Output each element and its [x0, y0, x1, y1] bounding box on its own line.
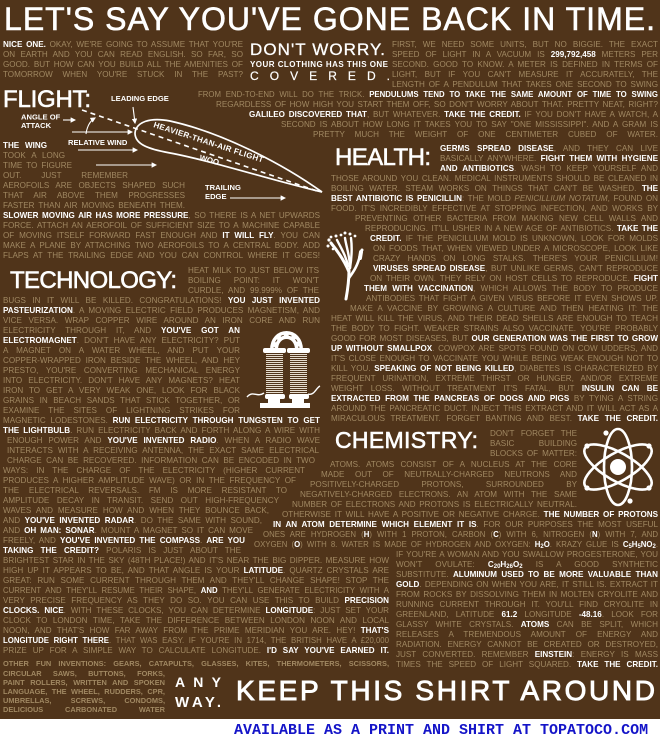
- text block: health main: FREQUENT URINATION, EXTREME THIRST OR HUNGER, AND/OR EXTREME: [331, 374, 658, 383]
- text block: units: FIRST, WE NEED SOME UNITS, BUT NO BIGGIE. THE EXACT: [392, 40, 658, 49]
- text block: the wing: FASTER THAN AIR MOVING BENEATH THEM.: [3, 201, 185, 210]
- diagram: aerofoil: [21, 94, 322, 201]
- text block: health main: GOOD FOR MOST DISEASES, BUT OUR GENERATION WAS THE FIRST TO GROW: [331, 334, 658, 343]
- text block: health main: FOOD. IT'S INCREDIBLY EFFECTIVE AT STOPPING INFECTION, AND WORKS BY: [331, 204, 658, 213]
- text block: other inventions: [3, 659, 389, 714]
- text block: pasteurization intro: [188, 266, 319, 295]
- text block: technology main: NOON, AND THAT'S HOW FAR AWAY FROM THE PRIME MERIDIAN YOU ARE. HEY! THAT'S: [3, 626, 389, 635]
- text block: technology main: CLOCK TO LONDON TIME, TAKE THE DIFFERENCE BETWEEN LONDON NOON AND LOCAL: [3, 616, 389, 625]
- text block: technology main: IRON TO GET A VERY WEAK ONE, LOOK FOR BLACK: [3, 386, 240, 395]
- chord line: [82, 110, 317, 191]
- text block: health main: AROUND THE PANCREATIC DUCT. INJECT THIS EXTRACT AND IT WILL ACT AS A: [331, 404, 658, 413]
- text block: health main: THOSE AROUND YOU CLEAN. MEDICAL INSTRUMENTS SHOULD BE CLEANED IN: [331, 174, 658, 183]
- text block: atoms: [254, 460, 658, 550]
- text block: health main: ANTIBODIES THAT FIGHT A GIVEN VIRUS BEFORE IT EVEN SHOWS UP.: [366, 294, 658, 303]
- text block: technology main: EXAMINE THE SITES OF LIGHTNING STRIKES FOR: [3, 406, 240, 415]
- text block: chemistry lower: GOLD. DEPENDING ON WHEN YOU ARE, IT STILL IS. EXTRACT IT: [396, 580, 658, 589]
- text block: the wing: FLAPS AT THE TRAILING EDGE AND YOU CAN CONTROL WHERE IT GOES!: [3, 251, 320, 260]
- text block: the wing: MAKE A PLANE BY ATTACHING TWO AEROFOILS TO A CENTRAL BODY. ADD: [3, 241, 320, 250]
- text block: pendulums: REGARDLESS OF HOW HIGH YOU START THEM OFF, SO DON'T WORRY ABOUT THAT. PRETTY NEAT, RIGHT?: [216, 100, 658, 109]
- text block: the wing: FORCE. ATTACH AN AEROFOIL OF SUFFICIENT SIZE TO A MACHINE CAPABLE: [3, 221, 320, 230]
- text block: technology main: TAKING THE CREDIT? POLARIS IS JUST ABOUT THE: [3, 546, 241, 555]
- text block: other inventions: DELICIOUS CARBONATED WATER: [3, 704, 165, 714]
- text block: chemistry lower: JUST CONVERTED. REMEMBER EINSTEIN: ENERGY IS MASS: [396, 650, 658, 659]
- text block: technology main: [3, 296, 389, 655]
- text block: chemistry lower: RADIATION. ENERGY CANNOT BE CREATED OR DESTROYED,: [396, 640, 658, 649]
- diagram labels: EDGE: [205, 192, 227, 201]
- text block: intro: NICE ONE. OKAY, WE'RE GOING TO ASSUME THAT YOU'RE: [3, 40, 243, 49]
- text block: atoms: MADE OUT OF NEUTRALLY-CHARGED NEUTRONS AND: [321, 470, 577, 479]
- text block: intro: GOOD. BUT HOW CAN YOU BUILD ALL THE AMENITIES OF: [3, 60, 243, 69]
- text block: technology main: AMPLITUDE DECAY IN TRANSIT. SEND OUT HIGH-FREQUENCY: [3, 496, 279, 505]
- text block: technology main: PRIZE UP FOR A SIMPLE WAY TO CALCULATE LONGITUDE. I'D SAY YOU'VE EARNED IT.: [3, 646, 389, 655]
- text block: technology main: COPPER-WRAPPED IRON BESIDE THE WHEEL, AND HEY: [3, 356, 240, 365]
- text block: health main: PREVENTING OTHER BACTERIA FROM MAKING NEW CELL WALLS AND: [355, 214, 658, 223]
- diagram labels: HEAVIER-THAN-AIR FLIGHT: [152, 120, 265, 164]
- text block: the wing: THE WING: [3, 141, 47, 150]
- text block: health main: THE BODY TO FIGHT. WEAKER STRAINS ALSO VACCINATE. YOU'RE PROBABLY: [331, 324, 658, 333]
- text block: health main: KILL YOU. SPEAKING OF NOT BEING KILLED, DIABETES IS CHARACTERIZED BY: [331, 364, 658, 373]
- callout: keep this shirt around: KEEP THIS SHIRT AROUND: [236, 675, 655, 706]
- title: LET'S SAY YOU'VE GONE BACK IN TIME.: [4, 1, 655, 37]
- text block: other inventions: UMBRELLAS, SCREWS, CONDOMS,: [3, 696, 165, 704]
- text block: technology main: ELECTRICITY THROUGH IT, AND YOU'VE GOT AN: [3, 326, 240, 335]
- text block: technology main: VERY PRECISE FREQUENCY AS THEY DO SO. YOU CAN USE THIS TO BUILD PRECISION: [3, 596, 389, 605]
- text block: other inventions: OTHER FUN INVENTIONS: GEARS, CATAPULTS, GLASSES, KITES, THERMOMETERS, SCISSORS,: [3, 659, 389, 668]
- text block: atoms: IN AN ATOM DETERMINE WHICH ELEMENT IT IS. FOR OUR PURPOSES THE MOST USEFUL: [273, 520, 658, 529]
- text block: other inventions: PAINT ROLLERS, WRITTEN AND SPOKEN: [3, 678, 165, 686]
- callout: don't worry: C O V E R E D .: [250, 69, 390, 83]
- text block: technology main: INTO ELECTRICITY. DON'T HAVE ANY MAGNETS? HEAT: [3, 376, 240, 385]
- text block: health main: [331, 174, 658, 423]
- text block: atoms: NUMBER OF ELECTRONS AND PROTONS IS ELECTRICALLY NEUTRAL.: [292, 500, 577, 509]
- text block: health main: ON THEIR OWN. THEY RELY ON HOST CELLS TO REPRODUCE. FIGHT: [370, 274, 658, 283]
- text block: chemistry lower: TIMES THE SPEED OF LIGHT SQUARED. TAKE THE CREDIT.: [396, 660, 658, 669]
- text block: technology main: BRIGHTEST STAR IN THE SKY (48TH PLACE!) AND IT'S NEAR THE BIG DIPPER. MEASURE HOW: [3, 556, 389, 565]
- text block: the wing: OUT. JUST REMEMBER: [3, 171, 128, 180]
- text block: basic building blocks: BLOCKS OF MATTER:: [490, 449, 577, 458]
- text block: chemistry lower: WON'T OVULATE: C20H26O2 IS A GOOD SYNTHETIC: [396, 560, 658, 570]
- text block: units: LIGHT, BUT IF YOU CAN'T MEASURE IT ACCURATELY, THE: [392, 70, 658, 79]
- diagram labels: [21, 94, 265, 201]
- text block: technology main: CLOCKS. NICE. WITH THESE CLOCKS, YOU CAN DETERMINE LONGITUDE: JUST SET YOUR: [3, 606, 389, 615]
- diagram labels: TRAILING: [205, 183, 241, 192]
- text block: germs: AND ANTIBIOTICS. WASH TO KEEP YOURSELF AND: [440, 164, 658, 173]
- text block: technology main: LONGITUDE RIGHT THERE. THAT WAS EASY. IF YOU'RE IN 1714, THE BRITISH HAVE A £20,000: [3, 636, 389, 645]
- text block: health main: IT'S CLOSE ENOUGH TO VACCINATE YOU WHILE BEING WEAK ENOUGH NOT TO: [331, 354, 658, 363]
- text block: technology main: PRODUCES A HIGHER AMPLITUDE WAVE) OR IN THE FREQUENCY OF: [3, 476, 296, 485]
- text block: technology main: WAVES AND MEASURE HOW AND WHEN THEY BOUNCE BACK,: [3, 506, 269, 515]
- text block: other inventions: LANGUAGE, THE WHEEL, RUDDERS, CPR,: [3, 686, 165, 696]
- text block: health main: BEST ANTIBIOTIC IS PENICILLIN: THE MOLD PENICILLIUM NOTATUM, FOUND ON: [331, 194, 658, 203]
- text block: technology main: ELECTROMAGNET. DON'T HAVE ANY ELECTRICITY? PUT: [3, 336, 240, 345]
- text block: chemistry lower: FROM ROCKS BY DISSOLVING THEM IN MOLTEN CRYOLITE AND: [396, 590, 658, 599]
- text block: health main: THEM WITH VACCINATION, WHICH ALLOWS THE BODY TO PRODUCE: [364, 284, 658, 293]
- text block: basic building blocks: BASIC BUILDING: [490, 439, 577, 448]
- text block: health main: CRAZY HANDS ON LONG STALKS. THERE'S YOUR PENICILLIUM!: [373, 254, 658, 263]
- text block: the wing: TIME TO FIGURE: [3, 161, 72, 170]
- text block: units: [392, 40, 658, 89]
- text block: pendulums: SECOND IS ABOUT HOW LONG IT TAKES YOU TO SAY "ONE MISSISSIPPI". AND A GRAM IS: [281, 120, 658, 129]
- text block: technology main: PASTEURIZATION. A MOVING ELECTRIC FIELD PRODUCES MAGNETISM, AND: [3, 306, 320, 315]
- text block: technology main: THE LIGHTBULB. RUN ELECTRICITY BACK AND FORTH ALONG A WIRE WITH: [3, 426, 320, 435]
- text block: pasteurization intro: BOILING POINT: IT WON'T: [188, 276, 319, 285]
- text block: technology main: MAGNETIC LODESTONES. RUN ELECTRICITY THROUGH TUNGSTEN TO GET: [3, 416, 320, 425]
- text block: chemistry lower: RELEASES A TREMENDOUS AMOUNT OF ENERGY AND: [396, 630, 658, 639]
- text block: technology main: AND YOU'VE INVENTED RADAR. DO THE SAME WITH SOUND,: [3, 516, 262, 525]
- text block: health main: VIRUSES SPREAD DISEASE, BUT UNLIKE GERMS, CAN'T REPRODUCE: [373, 264, 658, 273]
- text block: units: SPEED OF LIGHT IN A VACUUM IS 299,792,458 METERS PER: [392, 50, 658, 59]
- callout: any way: [175, 674, 222, 711]
- text block: health main: MIRACULOUS TREATMENT. FORGET BANTING AND BEST. TAKE THE CREDIT.: [331, 414, 658, 423]
- text block: basic building blocks: DON'T FORGET THE: [490, 429, 577, 438]
- text block: technology main: FREELY, AND YOU'VE INVENTED THE COMPASS. ARE YOU: [3, 536, 245, 545]
- text block: health main: ON FOODS THAT, WHEN VIEWED UNDER A MICROSCOPE, LOOK LIKE: [373, 244, 658, 253]
- text block: health main: BOILING WATER. STEAM WORKS ON THINGS THAT CAN'T BE WASHED. THE: [331, 184, 658, 193]
- callout: any way: WAY.: [175, 694, 221, 711]
- text block: atoms: NEGATIVELY-CHARGED ELECTRONS. AN ATOM WITH THE SAME: [300, 490, 577, 499]
- text block: technology main: BUGS IN IT WILL BE KILLED. CONGRATULATIONS! YOU JUST INVENTED: [3, 296, 320, 305]
- text block: basic building blocks: [490, 429, 577, 458]
- text block: health main: EXTRACTED FROM THE PANCREAS OF DOGS AND PIGS BY TYING A STRING: [331, 394, 658, 403]
- text block: chemistry lower: RUNNING CURRENT THROUGH IT. YOU'LL FIND CRYOLITE IN: [396, 600, 658, 609]
- text block: chemistry lower: GREENLAND, LATITUDE 61.2 LONGITUDE -48.16. LOOK FOR: [396, 610, 658, 619]
- text block: technology main: HIGH UP IT APPEARS TO BE, AND THAT ANGLE IS YOUR LATITUDE. QUARTZ CRYSTALS ARE: [3, 566, 389, 575]
- coils: [266, 353, 283, 395]
- callout: don't worry: [250, 40, 390, 83]
- text block: pendulums: PRETTY MUCH THE WEIGHT OF ONE CENTIMETER CUBED OF WATER.: [313, 130, 658, 139]
- diagram labels: ATTACK: [21, 121, 52, 130]
- text block: health main: HEAT WILL KILL THE VIRUS, AND THEIR DEAD SHELLS ARE ENOUGH TO TEACH: [331, 314, 658, 323]
- text block: units: LENGTH OF A PENDULUM THAT TAKES ONE SECOND TO SWING: [392, 80, 658, 89]
- text block: the wing: [3, 141, 320, 260]
- text block: the wing: AEROFOILS ARE OBJECTS SHAPED SUCH: [3, 181, 185, 190]
- text block: technology main: VICE VERSA. WRAP COPPER WIRE AROUND AN IRON CORE AND RUN: [3, 316, 320, 325]
- heading: chemistry: CHEMISTRY:: [335, 427, 478, 453]
- text block: technology main: CHARGE CAN BE RECOVERED. INFORMATION CAN BE ENCODED IN TWO: [7, 456, 315, 465]
- wires: [247, 386, 320, 397]
- text block: health main: WEIGHT LOSS. WITHOUT TREATMENT IT'S FATAL, BUT INSULIN CAN BE: [331, 384, 658, 393]
- aerofoil outline: [135, 120, 322, 192]
- text block: pendulums: GALILEO DISCOVERED THAT, BUT WHATEVER. TAKE THE CREDIT. IF YOU DON'T HAVE A WATCH, A: [249, 110, 658, 119]
- text block: atoms: POSITIVELY-CHARGED PROTONS, SURROUNDED BY: [310, 480, 577, 489]
- magnet arch: [274, 335, 299, 350]
- heading: health: HEALTH:: [335, 144, 431, 171]
- text block: chemistry lower: IF YOU'RE A WOMAN AND YOU SWALLOW PROGESTERONE, YOU: [396, 550, 658, 559]
- text block: technology main: GRAINS IN BEACH SANDS THAT STICK TOGETHER, OR: [3, 396, 240, 405]
- text block: pendulums: [198, 90, 658, 139]
- text block: the wing: OF MOVING ITSELF FORWARD FAST ENOUGH AND IT WILL FLY. YOU CAN: [3, 231, 320, 240]
- text block: intro: ON EARTH AND YOU CAN READ ENGLISH. SO FAR, SO: [3, 50, 243, 59]
- callout: any way: A N Y: [175, 674, 222, 690]
- callout: don't worry: DON'T WORRY.: [250, 40, 385, 59]
- icon: electromagnet: [246, 331, 320, 408]
- text block: atoms: ONES ARE HYDROGEN (H) WITH 1 PROTON, CARBON (C) WITH 6, NITROGEN (N) WITH 7, AND: [263, 530, 658, 539]
- text block: germs: GERMS SPREAD DISEASE, AND THEY CAN LIVE: [440, 144, 658, 153]
- text block: the wing: THAT AIR ABOVE THEM PROGRESSES: [3, 191, 185, 200]
- text block: the wing: SLOWER MOVING AIR HAS MORE PRESSURE, SO THERE IS A NET UPWARDS: [3, 211, 320, 220]
- text block: technology main: AND OH MAN: SONAR. MOUNT A MAGNET SO IT CAN MOVE: [3, 526, 253, 535]
- text block: chemistry lower: GLASSY WHITE CRYSTALS. ATOMS CAN BE SPLIT, WHICH: [396, 620, 658, 629]
- footer link text: AVAILABLE AS A PRINT AND SHIRT AT TOPATOCO.COM: [234, 722, 648, 739]
- flow arrows: [63, 107, 285, 198]
- text block: technology main: WAYS: IN THE CHARGE OF THE ELECTRICITY (HIGHER CURRENT: [3, 466, 305, 475]
- text block: health main: CREDIT. IF THE PENICILLIUM MOLD IS UNKNOWN, LOOK FOR MOLDS: [370, 234, 658, 243]
- text block: technology main: CURRENT AND THEY'LL RESUME THEIR SHAPE, AND THEY'LL GENERATE ELECTRICITY WITH A: [3, 586, 389, 595]
- text block: health main: MAKE A VACCINE BY GROWING A CULTURE AND THEN HEATING IT: THE: [350, 304, 658, 313]
- text block: technology main: GREAT: RUN SOME CURRENT THROUGH THEM AND THEY'LL CHANGE SHAPE! STOP THE: [3, 576, 389, 585]
- text block: the wing: TOOK A LONG: [3, 151, 65, 160]
- text block: germs: [440, 144, 658, 173]
- heading: technology: TECHNOLOGY:: [10, 267, 177, 294]
- icon: penicillium mold: [326, 232, 364, 300]
- text block: health main: REPRODUCING. IT'LL USHER IN A NEW AGE OF ANTIBIOTICS. TAKE THE: [365, 224, 658, 233]
- text block: other inventions: CIRCULAR SAWS, BUTTONS, FORKS,: [3, 668, 165, 678]
- callout: don't worry: YOUR CLOTHING HAS THIS ONE: [250, 60, 389, 69]
- text block: pendulums: FROM END-TO-END WILL DO THE TRICK. PENDULUMS TEND TO TAKE THE SAME AMOUNT OF TIME TO SWING: [198, 90, 658, 99]
- text block: intro: TOMORROW WHEN YOU'RE STUCK IN THE PAST?: [3, 70, 243, 79]
- text block: atoms: ATOMS. ATOMS CONSIST OF A NUCLEUS AT THE CORE: [330, 460, 577, 469]
- icon: atom: [583, 428, 653, 506]
- diagram labels: WOO: [198, 153, 220, 167]
- text block: units: SECOND. GOOD TO KNOW. A METER IS DEFINED IN TERMS OF: [392, 60, 658, 69]
- text block: chemistry lower: SUBSTITUTE. ALUMINUM USED TO BE MORE VALUABLE THAN: [396, 570, 658, 579]
- text block: health main: UP WITHOUT SMALLPOX. COWPOX ARE SPOTS FOUND ON COW UDDERS, AND: [331, 344, 658, 353]
- text block: germs: BASICALLY ANYWHERE. FIGHT THEM WITH HYGIENE: [440, 154, 658, 163]
- heading: flight: FLIGHT:: [3, 86, 91, 113]
- text block: technology main: INTERACTS WITH A RECEIVING ANTENNA, THE EXACT SAME ELECTRICAL: [7, 446, 319, 455]
- diagram labels: LEADING EDGE: [111, 94, 169, 103]
- diagram labels: RELATIVE WIND: [68, 138, 128, 147]
- text block: technology main: A MAGNET ON A WATER WHEEL, AND PUT YOUR: [3, 346, 240, 355]
- text block: technology main: THE ELECTRICAL REVERSALS. FM IS MORE RESISTANT TO: [3, 486, 287, 495]
- base: [260, 403, 310, 408]
- text block: pasteurization intro: CURDLE, AND 99.999% OF THE: [188, 286, 319, 295]
- text block: chemistry lower: [396, 550, 658, 669]
- text block: atoms: OXYGEN (O) WITH 8. WATER IS MADE OF HYDROGEN AND OXYGEN: H2O. KRAZY GLUE IS C5H5NO2.: [254, 540, 658, 550]
- text block: intro: [3, 40, 243, 79]
- diagram labels: ANGLE OF: [21, 112, 61, 122]
- text block: technology main: PRESTO, YOU'RE CONVERTING MECHANICAL ENERGY: [3, 366, 240, 375]
- text block: technology main: ENOUGH POWER AND YOU'VE INVENTED RADIO. WHEN A RADIO WAVE: [7, 436, 320, 445]
- text block: atoms: OTHERWISE IT WILL HAVE A POSITIVE OR NEGATIVE CHARGE. THE NUMBER OF PROTONS: [282, 510, 658, 519]
- text block: pasteurization intro: HEAT MILK TO JUST BELOW ITS: [188, 266, 319, 275]
